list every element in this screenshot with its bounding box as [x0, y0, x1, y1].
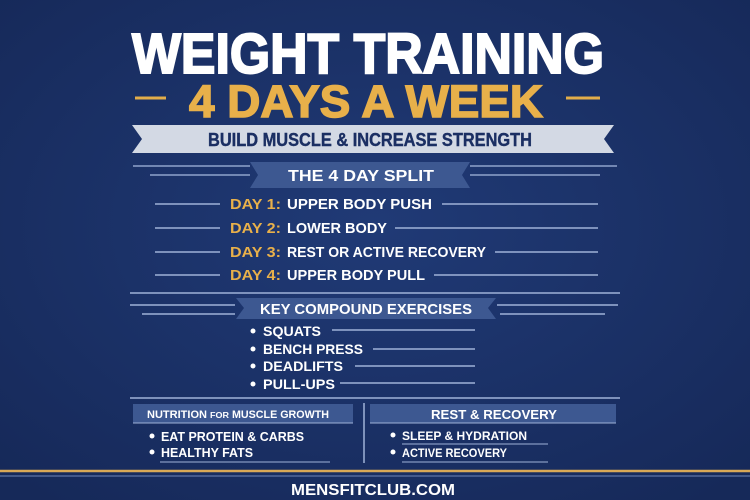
panel: nutrition: FOR	[210, 411, 229, 420]
panel: rest & recovery	[370, 404, 616, 462]
day list: DAY 2:	[230, 220, 281, 237]
panel: rest & recovery: REST & RECOVERY	[431, 407, 557, 422]
day list: REST OR ACTIVE RECOVERY	[287, 244, 486, 261]
panel: rest & recovery: ACTIVE RECOVERY	[402, 446, 507, 460]
day list: LOWER BODY	[287, 220, 387, 237]
banner: the 4 day split	[250, 162, 470, 188]
exercise list: SQUATS	[263, 323, 321, 339]
exercise list	[250, 323, 475, 392]
day list: UPPER BODY PULL	[287, 267, 425, 284]
footer: MENSFITCLUB.COM	[291, 482, 455, 499]
day list: DAY 3:	[230, 244, 281, 261]
panel: nutrition: MUSCLE GROWTH	[232, 409, 329, 421]
exercise list: DEADLIFTS	[263, 358, 343, 374]
title: WEIGHT TRAINING	[132, 22, 604, 86]
exercise list: BENCH PRESS	[263, 341, 363, 357]
subtitle ribbon: BUILD MUSCLE & INCREASE STRENGTH	[208, 130, 532, 150]
banner: the 4 day split: THE 4 DAY SPLIT	[288, 168, 434, 185]
day list: UPPER BODY PUSH	[287, 196, 432, 213]
title	[132, 22, 604, 127]
panel: nutrition: NUTRITION	[147, 409, 207, 421]
panel: rest & recovery: SLEEP & HYDRATION	[402, 429, 527, 443]
panel: nutrition: EAT PROTEIN & CARBS	[161, 429, 304, 444]
panel: nutrition: HEALTHY FATS	[161, 445, 253, 460]
day list: DAY 4:	[230, 267, 281, 284]
subtitle ribbon	[132, 125, 614, 153]
banner: key compound exercises	[236, 298, 496, 319]
day list	[155, 196, 598, 284]
title: 4 DAYS A WEEK	[189, 76, 544, 127]
panel: nutrition	[133, 404, 353, 462]
banner: key compound exercises: KEY COMPOUND EXERCISES	[260, 301, 472, 318]
day list: DAY 1:	[230, 196, 281, 213]
exercise list: PULL-UPS	[263, 376, 335, 392]
